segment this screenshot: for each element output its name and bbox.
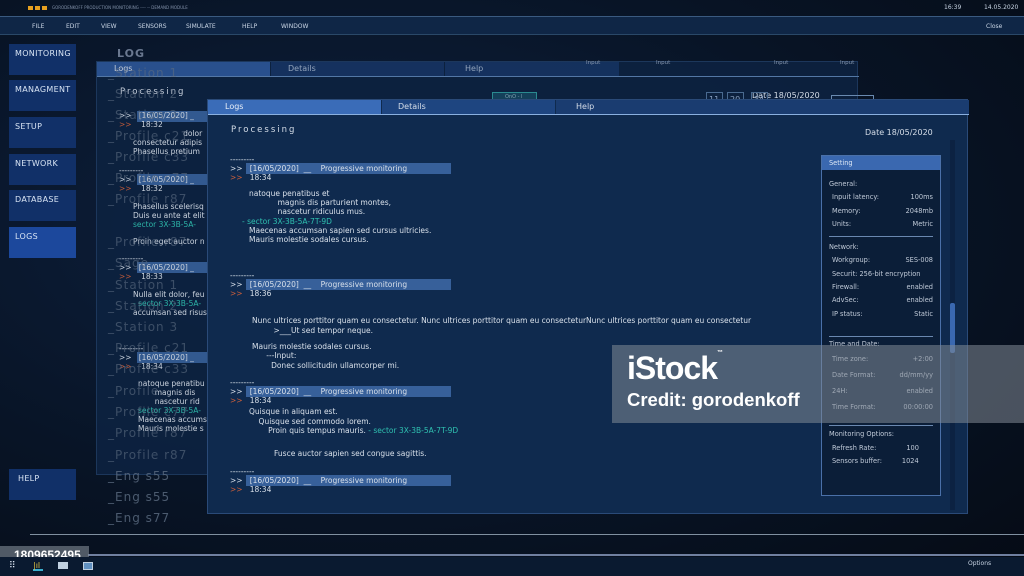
taskbar: Options xyxy=(968,560,991,567)
background log window: >> 18:33 xyxy=(119,272,163,281)
entry 3 xyxy=(230,378,458,458)
circuit boxes: 11 xyxy=(709,95,719,104)
setting panel: +2:00 xyxy=(913,355,933,363)
menu bar: SIMULATE xyxy=(186,23,216,30)
background log window: --------- xyxy=(119,166,143,175)
background station list: _Station 2 xyxy=(108,299,178,313)
menu bar: SENSORS xyxy=(138,23,167,30)
entry 2: >___Ut sed tempor neque. xyxy=(273,326,373,334)
background log window: >> [16/05/2020] _ xyxy=(119,353,194,362)
setting panel: 00:00:00 xyxy=(903,403,933,411)
setting panel: AdvSec: xyxy=(832,296,859,304)
tabs: Logs xyxy=(225,102,243,111)
background log window: magnis dis xyxy=(155,388,195,397)
text: Input xyxy=(774,60,788,66)
background log window: Duis eu ante at elit xyxy=(133,211,205,220)
entry 4: >> 18:34 xyxy=(230,485,271,494)
background log window: sector 3X-3B-5A- xyxy=(133,220,196,229)
background station list: _Eng s77 xyxy=(108,511,170,525)
setting panel: Monitoring Options: xyxy=(829,430,894,438)
menu bar: FILE xyxy=(32,23,44,30)
background log window: Logs xyxy=(114,64,132,73)
background log window: Mauris molestie s xyxy=(138,424,204,433)
entry 2: --------- xyxy=(230,271,254,280)
button network xyxy=(9,154,76,185)
menu bar: EDIT xyxy=(66,23,80,30)
title bar: 16:39 xyxy=(944,4,961,11)
background station list: _Profile c77 xyxy=(108,405,189,419)
background log window: nascetur rid xyxy=(155,397,200,406)
setting panel: Time zone: xyxy=(832,355,868,363)
background log window: >> 18:32 xyxy=(119,184,163,193)
background log window: >> [16/05/2020] _ xyxy=(119,111,194,120)
entry 3: Quisque in aliquam est. xyxy=(249,407,338,416)
setting panel: Securit: 256-bit encryption xyxy=(832,270,920,278)
taskbar: |ıl xyxy=(33,561,40,570)
watermark xyxy=(612,345,1024,423)
background station list: _Station 1 xyxy=(108,278,178,292)
entry 4 xyxy=(230,467,451,494)
entry 2: ---Input: xyxy=(266,351,296,360)
background log window xyxy=(96,61,858,475)
setting panel: 24H: xyxy=(832,387,848,395)
tabs xyxy=(208,100,969,115)
front log window xyxy=(207,99,968,514)
setting panel: Static xyxy=(914,310,933,318)
background station list: _Profile c33 xyxy=(108,150,189,164)
button setup: SETUP xyxy=(15,122,42,131)
text: Input xyxy=(840,60,854,66)
background log window: consectetur adipis xyxy=(133,138,202,147)
setting panel: 2048mb xyxy=(906,207,933,215)
entry 1: >> [16/05/2020] __ Progressive monitoring xyxy=(230,164,407,173)
background log window: sector 3X-3B-5A- xyxy=(138,406,201,415)
tabs: Help xyxy=(576,102,594,111)
background station list: _Sage xyxy=(108,256,149,270)
background log window: Phasellus pretium xyxy=(133,147,200,156)
entry 2 xyxy=(230,271,752,370)
background station list: _Profile r87 xyxy=(108,235,187,249)
background log window: Maecenas accums xyxy=(138,415,207,424)
setting panel: Date Format: xyxy=(832,371,875,379)
button setup xyxy=(9,117,76,148)
background log window: >> 18:34 xyxy=(119,362,163,371)
setting panel: Sensors buffer: 1024 xyxy=(832,457,919,465)
entry 1 xyxy=(230,155,451,244)
entry 1: Maecenas accumsan sapien sed cursus ultricies. xyxy=(249,226,431,235)
title bar xyxy=(28,4,1018,11)
setting panel: Metric xyxy=(912,220,933,228)
setting panel: Memory: xyxy=(832,207,861,215)
background log window: dolor xyxy=(183,129,202,138)
setting panel: Firewall: xyxy=(832,283,859,291)
setting panel: Inpuit latency: xyxy=(832,193,879,201)
background station list: _Eng s55 xyxy=(108,490,170,504)
entry 2: >> 18:36 xyxy=(230,289,271,298)
background log window: >> [16/05/2020] _ xyxy=(119,263,194,272)
setting panel: General: xyxy=(829,180,857,188)
entry 3: Fusce auctor sapien sed congue sagittis. xyxy=(274,449,427,458)
circuit boxes xyxy=(492,92,874,104)
button network: NETWORK xyxy=(15,159,58,168)
setting panel: dd/mm/yy xyxy=(900,371,933,379)
menu bar: Close xyxy=(986,23,1002,30)
background log window: --------- xyxy=(119,254,143,263)
background station list xyxy=(108,66,189,525)
background station list: _Station 3 xyxy=(108,108,178,122)
entry 1: Mauris molestie sodales cursus. xyxy=(249,235,369,244)
setting panel: enabled xyxy=(906,387,933,395)
text: Input xyxy=(656,60,670,66)
LOG heading: LOG xyxy=(117,47,145,60)
background log window: >> [16/05/2020] _ xyxy=(119,175,194,184)
background station list: _Profile c21 xyxy=(108,341,189,355)
setting panel xyxy=(821,155,941,496)
watermark: Credit: gorodenkoff xyxy=(627,389,800,410)
entry 2: Mauris molestie sodales cursus. xyxy=(252,342,372,351)
id tag xyxy=(0,546,89,564)
background log window: Proin eget auctor n xyxy=(133,237,205,246)
background station list: _Profile xyxy=(108,384,159,398)
background station list: _Profile c77 xyxy=(108,171,189,185)
circuit boxes: 34 xyxy=(754,95,764,104)
setting panel: SES-008 xyxy=(905,256,933,264)
entry 2: >> [16/05/2020] __ Progressive monitoring xyxy=(230,280,407,289)
background station list: _Profile r87 xyxy=(108,448,187,462)
background station list: _Profile c33 xyxy=(108,362,189,376)
menu bar: HELP xyxy=(242,23,257,30)
watermark: iStock™ xyxy=(627,350,722,386)
button database xyxy=(9,190,76,221)
taskbar xyxy=(0,557,1024,576)
entry 3: --------- xyxy=(230,378,254,387)
top input labels xyxy=(586,60,854,66)
tabs: Details xyxy=(398,102,426,111)
entry 1: --------- xyxy=(230,155,254,164)
background station list: _Eng s55 xyxy=(108,469,170,483)
entry 3: Proin quis tempus mauris. - sector 3X-3B-5A-7T-9D xyxy=(268,426,458,435)
background station list: _Profile r87 xyxy=(108,192,187,206)
setting panel: Units: xyxy=(832,220,851,228)
entry 2: Nunc ultrices porttitor quam eu consectetur. Nunc ultrices porttitor quam eu consecteturNunc ultrices porttitor quam eu consectetur xyxy=(252,316,751,325)
entry 1: - sector 3X-3B-5A-7T-9D xyxy=(242,217,332,226)
button logs xyxy=(9,227,76,258)
taskbar: ⠿ xyxy=(9,561,16,571)
title bar: 14.05.2020 xyxy=(984,4,1018,11)
bottom line xyxy=(30,534,1024,535)
background log window: >> 18:32 xyxy=(119,120,163,129)
background log window: --------- xyxy=(119,344,143,353)
background station list: _Station 1 xyxy=(108,66,178,80)
background log window: Processing xyxy=(120,87,185,97)
button logs: LOGS xyxy=(15,232,38,241)
background log window: Help xyxy=(465,64,483,73)
background log window: Details xyxy=(288,64,316,73)
id tag: 1809652495 xyxy=(14,548,81,562)
entry 3: Quisque sed commodo lorem. xyxy=(259,416,371,426)
processing heading: Processing xyxy=(231,125,296,135)
background log window: natoque penatibu xyxy=(138,379,205,388)
entry 1: magnis dis parturient montes, xyxy=(278,198,391,207)
entry 1: nascetur ridiculus mus. xyxy=(278,207,365,216)
setting panel: IP status: xyxy=(832,310,862,318)
setting panel: Time Format: xyxy=(832,403,876,411)
setting panel: 100ms xyxy=(911,193,933,201)
background log window: - sector 3X-3B-5A- xyxy=(133,299,201,308)
button monitoring: MONITORING xyxy=(15,49,71,58)
background station list: _Station 3 xyxy=(108,320,178,334)
setting panel: Workgroup: xyxy=(832,256,870,264)
date label back: Date 18/05/2020 xyxy=(752,91,820,100)
entry 3: >> [16/05/2020] __ Progressive monitoring xyxy=(230,387,407,396)
date: Date 18/05/2020 xyxy=(865,128,933,137)
background station list: _Profile c21 xyxy=(108,129,189,143)
entry 4: >> [16/05/2020] __ Progressive monitoring xyxy=(230,476,407,485)
setting panel: Setting xyxy=(829,159,853,167)
background log window: accumsan sed risus xyxy=(133,308,207,317)
menu bar: VIEW xyxy=(101,23,117,30)
button help xyxy=(9,469,76,500)
title bar: GORODENKOFF PRODUCTION MONITORING ---- -- DEMAND MODULE xyxy=(52,5,188,10)
background station list: _Station 2 xyxy=(108,87,178,101)
setting panel: Network: xyxy=(829,243,859,251)
entry 1: natoque penatibus et xyxy=(249,189,330,198)
button help: HELP xyxy=(18,474,40,483)
background log window: Phasellus scelerisq xyxy=(133,202,204,211)
background log window: Nulla elit dolor, feu xyxy=(133,290,204,299)
button managment xyxy=(9,80,76,111)
sidebar xyxy=(9,44,76,500)
circuit boxes: 20 xyxy=(730,95,740,104)
entry 4: --------- xyxy=(230,467,254,476)
entry 2: Donec sollicitudin ullamcorper mi. xyxy=(271,361,399,370)
text: Input xyxy=(586,60,600,66)
setting panel: Time and Date: xyxy=(829,340,880,348)
menu bar: WINDOW xyxy=(281,23,308,30)
button managment: MANAGMENT xyxy=(15,85,70,94)
background station list: _Profile r87 xyxy=(108,426,187,440)
setting panel: Refresh Rate: 100 xyxy=(832,444,919,452)
entry 1: >> 18:34 xyxy=(230,173,271,182)
entry 3: >> 18:34 xyxy=(230,396,271,405)
menu bar xyxy=(0,16,1024,35)
scrollbar xyxy=(950,140,955,510)
circuit boxes: OnO - I xyxy=(505,94,522,100)
setting panel: enabled xyxy=(906,283,933,291)
button database: DATABASE xyxy=(15,195,59,204)
setting panel: enabled xyxy=(906,296,933,304)
button monitoring xyxy=(9,44,76,75)
